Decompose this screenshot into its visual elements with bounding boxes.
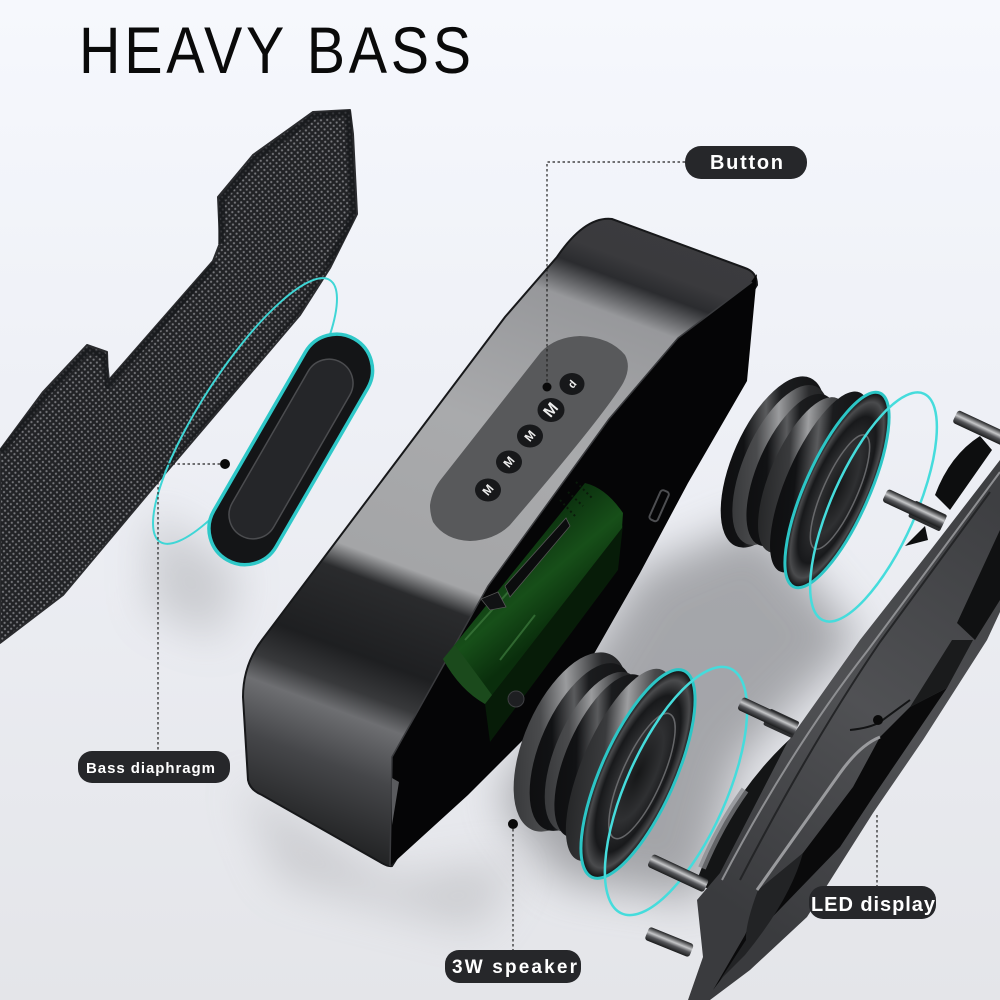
battery clip — [505, 518, 570, 597]
buttons: M — [541, 400, 562, 421]
buttons — [475, 373, 584, 502]
battery highlight — [465, 590, 535, 660]
outline ring — [576, 648, 776, 934]
speaker grille mesh — [0, 110, 357, 643]
speaker body — [243, 219, 757, 866]
mounting pins — [644, 410, 1000, 957]
battery terminal dots — [560, 482, 592, 516]
lens arc — [720, 853, 803, 980]
battery — [443, 483, 623, 704]
interior cavity — [390, 274, 757, 866]
body outer shell — [243, 219, 757, 866]
display recess — [957, 530, 1000, 640]
plate — [688, 460, 1000, 1000]
rear rings behind plate — [935, 436, 992, 510]
callout: LED display — [809, 815, 936, 919]
button panel — [430, 336, 628, 541]
buttons: M — [521, 428, 539, 444]
callout: Button: Button — [710, 152, 783, 174]
callout: 3W speaker — [445, 819, 581, 983]
callout: 3W speaker: 3W speaker — [452, 957, 578, 978]
left bass diaphragm with outline rings — [125, 257, 386, 578]
upper right speaker driver — [699, 362, 962, 637]
callout: Button — [542, 146, 807, 392]
cavity lip — [390, 282, 752, 866]
battery lower shadow — [485, 525, 623, 742]
buttons: M — [479, 482, 497, 498]
inner bevel — [722, 472, 1000, 880]
usb port — [649, 489, 670, 522]
lower speaker driver — [490, 636, 776, 934]
jack — [508, 691, 524, 707]
callout: LED display: LED display — [811, 894, 936, 916]
interior detail — [392, 778, 399, 825]
title: HEAVY BASS — [79, 14, 475, 88]
buttons: M — [500, 454, 518, 470]
plate cavity — [713, 688, 947, 990]
callout: Bass diaphragm — [78, 459, 230, 783]
battery end — [443, 645, 492, 704]
callout: Bass diaphragm: Bass diaphragm — [86, 760, 215, 777]
back plate with LED display — [688, 436, 1000, 1000]
buttons: d — [566, 378, 580, 391]
outline ring — [785, 377, 962, 637]
